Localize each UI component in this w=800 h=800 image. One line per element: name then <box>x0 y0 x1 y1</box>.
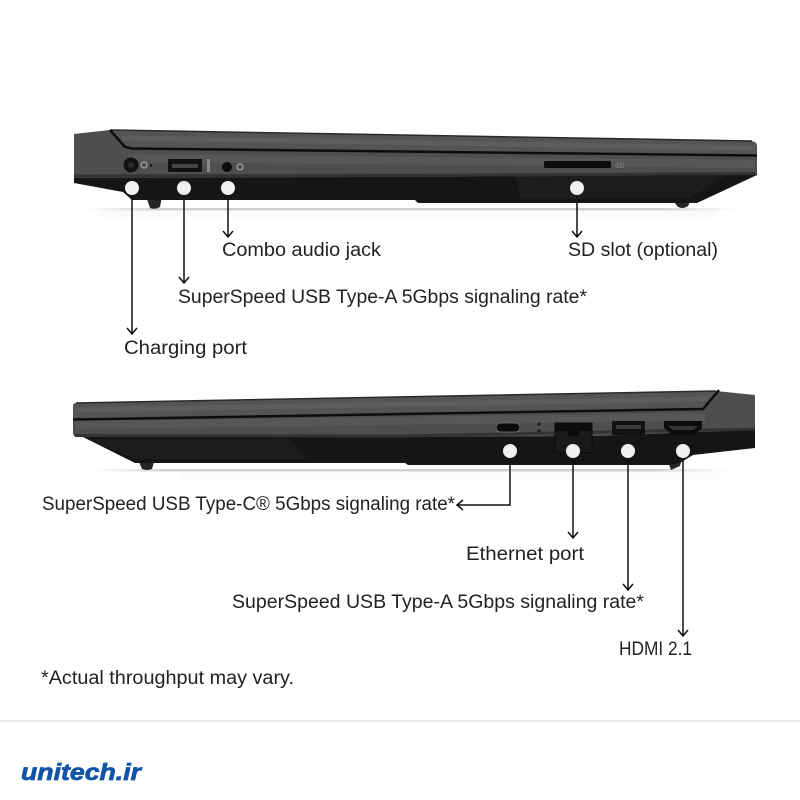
lid top edge <box>110 130 752 141</box>
ground shadow <box>90 469 730 478</box>
footnote: *Actual throughput may vary. <box>41 668 294 689</box>
body highlight <box>128 158 755 164</box>
lid top edge <box>76 391 716 403</box>
speaker mesh <box>515 176 725 199</box>
audio jack <box>222 162 232 172</box>
callout: Ethernet port: Ethernet port <box>466 544 585 565</box>
speaker mesh <box>87 439 307 459</box>
body lower edge <box>75 429 755 436</box>
callout: USB-C <box>42 444 517 515</box>
rubber feet <box>146 196 692 209</box>
callout: USB-A left <box>177 181 588 308</box>
black underside <box>74 165 757 203</box>
lid highlight <box>122 138 755 148</box>
callout: HDMI: HDMI 2.1 <box>619 639 692 660</box>
laptop: left side view: SD <box>615 163 625 170</box>
callout: USB-A left: SuperSpeed USB Type-A 5Gbps signaling rate* <box>178 287 588 308</box>
lid highlight <box>75 399 708 410</box>
callout: USB-C: SuperSpeed USB Type-C® 5Gbps signaling rate* <box>42 494 456 515</box>
divider <box>0 720 800 722</box>
hinge slit <box>73 390 719 420</box>
USB-A port <box>612 421 645 435</box>
callout: charging port: Charging port <box>124 338 248 359</box>
callout: Ethernet port <box>466 444 585 565</box>
body highlight <box>75 417 705 425</box>
body lower edge <box>74 174 755 176</box>
USB-A port <box>168 159 202 172</box>
lid <box>110 130 757 155</box>
callout: SD slot <box>568 181 718 261</box>
logo: unitech.ir: unitech.ir <box>21 759 142 785</box>
charging port <box>124 158 138 172</box>
lid <box>73 391 716 419</box>
Ethernet port <box>555 423 592 452</box>
callout: HDMI <box>619 444 692 660</box>
grey body <box>74 130 757 178</box>
HDMI port <box>664 421 702 434</box>
grey body <box>73 391 755 437</box>
callout: charging port <box>124 181 248 359</box>
callout: USB-A right: SuperSpeed USB Type-A 5Gbps signaling rate* <box>232 592 645 613</box>
callout: combo audio jack <box>221 181 382 261</box>
SD slot <box>544 161 611 168</box>
callout: USB-A right <box>232 444 645 613</box>
USB label <box>207 159 210 172</box>
rubber feet <box>139 458 682 470</box>
black underside <box>73 428 755 465</box>
laptop: right side view <box>73 390 755 478</box>
callout: SD slot: SD slot (optional) <box>568 240 718 261</box>
laptop: left side view <box>74 130 757 216</box>
ground shadow <box>80 208 740 216</box>
hinge slit <box>110 130 757 156</box>
callout: combo audio jack: Combo audio jack <box>222 240 382 261</box>
USB-C port <box>496 423 520 432</box>
status lights <box>537 422 541 426</box>
